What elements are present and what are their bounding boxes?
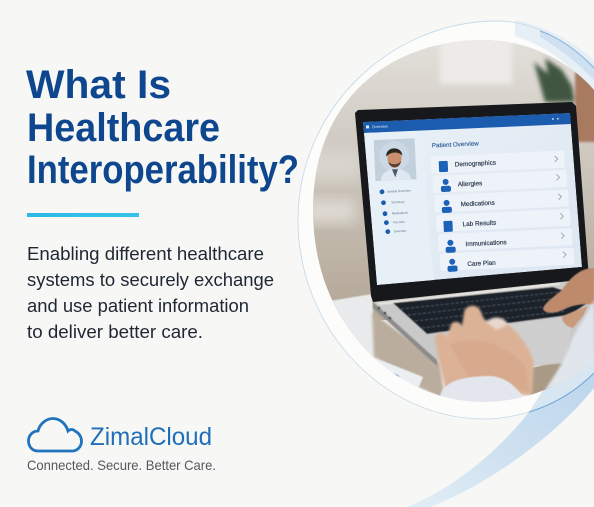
list labels: Medications: [461, 200, 495, 208]
laptop screen: [363, 113, 582, 285]
screen text and list, rotated with laptop: Overview: [372, 124, 388, 129]
ring accent: upper right: [540, 31, 594, 68]
decorative swoosh: upper right: [515, 20, 594, 95]
keyboard: [393, 287, 592, 334]
description: Enabling different healthcare: [27, 243, 264, 264]
heading: Patient Overview: Patient Overview: [432, 140, 479, 149]
photo: laptop with patient overview: [300, 30, 594, 410]
list labels: Demographics: [455, 160, 496, 168]
white ring band around the photo: [298, 21, 594, 419]
sidebar menu: Sample Overview: [387, 188, 411, 194]
list rows: [430, 150, 574, 271]
screen header bar: [363, 113, 571, 133]
list chevrons: [555, 156, 566, 258]
screen text and list, rotated with laptop: [366, 116, 575, 275]
logo: ZimalCloud: [27, 418, 216, 473]
blurred room background: [300, 30, 594, 320]
wordmark: ZimalCloud: [90, 423, 212, 451]
decorative swoosh: lower right: [407, 350, 594, 507]
profile photo: [374, 138, 416, 181]
sidebar menu: [380, 189, 410, 234]
title: What Is: [26, 63, 171, 107]
description: and use patient information: [27, 295, 249, 316]
title: Healthcare: [27, 106, 220, 150]
sidebar panel: [364, 131, 434, 285]
sleeve: [440, 376, 523, 402]
list labels: Immunications: [465, 239, 507, 248]
tagline: Connected. Secure. Better Care.: [27, 457, 216, 473]
icon: cloud: [28, 418, 82, 451]
list icons: [439, 161, 458, 272]
sidebar menu: Records: [393, 220, 405, 224]
list labels: [455, 159, 508, 268]
desk: [332, 294, 563, 397]
sidebar menu: Medications: [392, 211, 409, 215]
description: [27, 243, 274, 342]
sidebar menu: Overview: [394, 229, 407, 233]
thin outer ring: [298, 21, 594, 419]
sidebar menu: Summary: [391, 200, 405, 204]
ring accent: lower right: [529, 373, 594, 412]
list labels: Care Plan: [467, 260, 496, 268]
hand: left foreground: [435, 306, 534, 396]
laptop base: [373, 278, 594, 366]
description: systems to securely exchange: [27, 269, 274, 290]
laptop screen bezel: [355, 102, 589, 302]
title: Interoperability?: [27, 148, 299, 192]
list labels: Allergies: [458, 180, 482, 188]
description: to deliver better care.: [27, 321, 203, 342]
accent bar: [27, 213, 139, 217]
list labels: Lab Results: [462, 220, 496, 228]
sleeve: right: [545, 300, 594, 400]
hand: right on keyboard: [543, 268, 594, 328]
title: [26, 63, 299, 192]
